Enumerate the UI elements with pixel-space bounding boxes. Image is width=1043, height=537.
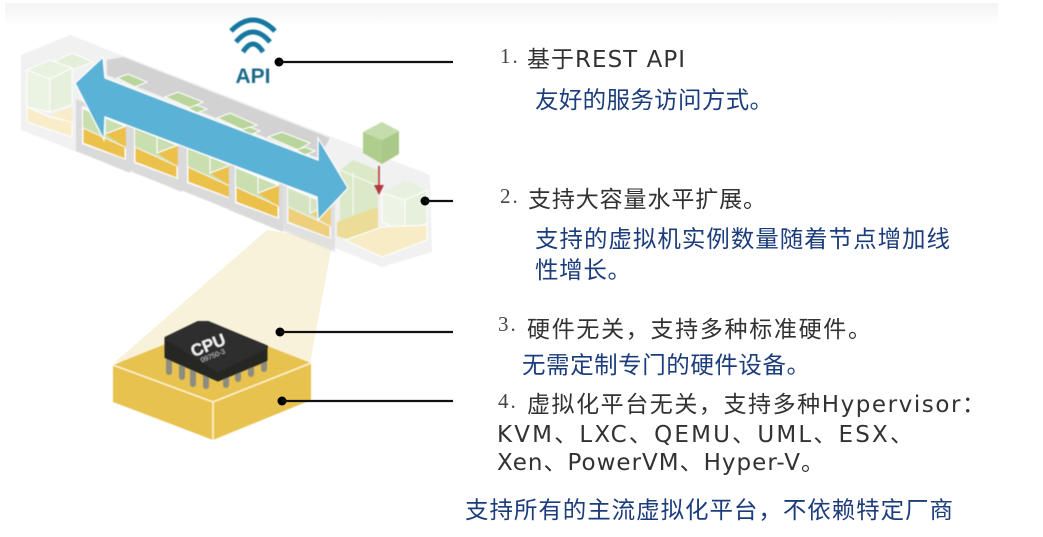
server rack row xyxy=(21,35,432,267)
icon: CPU chip: 09750-3 xyxy=(200,348,227,365)
text block 2: 支持大容量水平扩展。 xyxy=(528,187,766,213)
middle node fronts xyxy=(76,99,130,173)
text block 1: 友好的服务访问方式。 xyxy=(535,86,773,114)
text block 2: 支持的虚拟机实例数量随着节点增加线 xyxy=(535,225,950,253)
callout line 2 xyxy=(420,196,453,206)
middle node tops xyxy=(107,57,330,158)
text block 4: KVM、LXC、QEMU、UML、ESX、 xyxy=(497,422,913,448)
callout line 3 xyxy=(276,328,453,336)
text block 2: 性增长。 xyxy=(535,256,631,284)
callout line 1 xyxy=(274,58,453,66)
icon: wifi API: API xyxy=(236,65,270,88)
text block 3: 3. xyxy=(498,312,518,336)
text block 1 xyxy=(500,44,773,114)
text block 3 xyxy=(498,312,871,379)
icon: falling green cube xyxy=(363,122,399,164)
blue double-headed arrow xyxy=(75,57,348,220)
icon: wifi API xyxy=(231,20,275,88)
text block 2: 2. xyxy=(500,184,520,208)
yellow spotlight beam xyxy=(115,230,333,363)
text block 3: 无需定制专门的硬件设备。 xyxy=(522,351,810,379)
text block 3: 硬件无关，支持多种标准硬件。 xyxy=(527,317,871,343)
callout line 4 xyxy=(278,396,453,406)
bottom summary: 支持所有的主流虚拟化平台，不依赖特定厂商 xyxy=(465,496,953,524)
icon: CPU chip: CPU xyxy=(188,330,228,361)
red down arrow xyxy=(374,166,384,195)
text block 4: Xen、PowerVM、Hyper-V。 xyxy=(497,450,824,476)
text block 4: 虚拟化平台无关，支持多种Hypervisor： xyxy=(527,392,985,418)
left pale node xyxy=(27,53,93,137)
icon: CPU chip xyxy=(166,323,266,386)
text block 1: 1. xyxy=(500,44,520,68)
text block 4 xyxy=(497,389,985,476)
text block 4: 4. xyxy=(498,389,518,413)
text block 1: 基于REST API xyxy=(527,47,685,73)
right pale nodes xyxy=(337,160,427,257)
text block 2 xyxy=(500,184,950,284)
yellow hardware block xyxy=(113,325,311,440)
